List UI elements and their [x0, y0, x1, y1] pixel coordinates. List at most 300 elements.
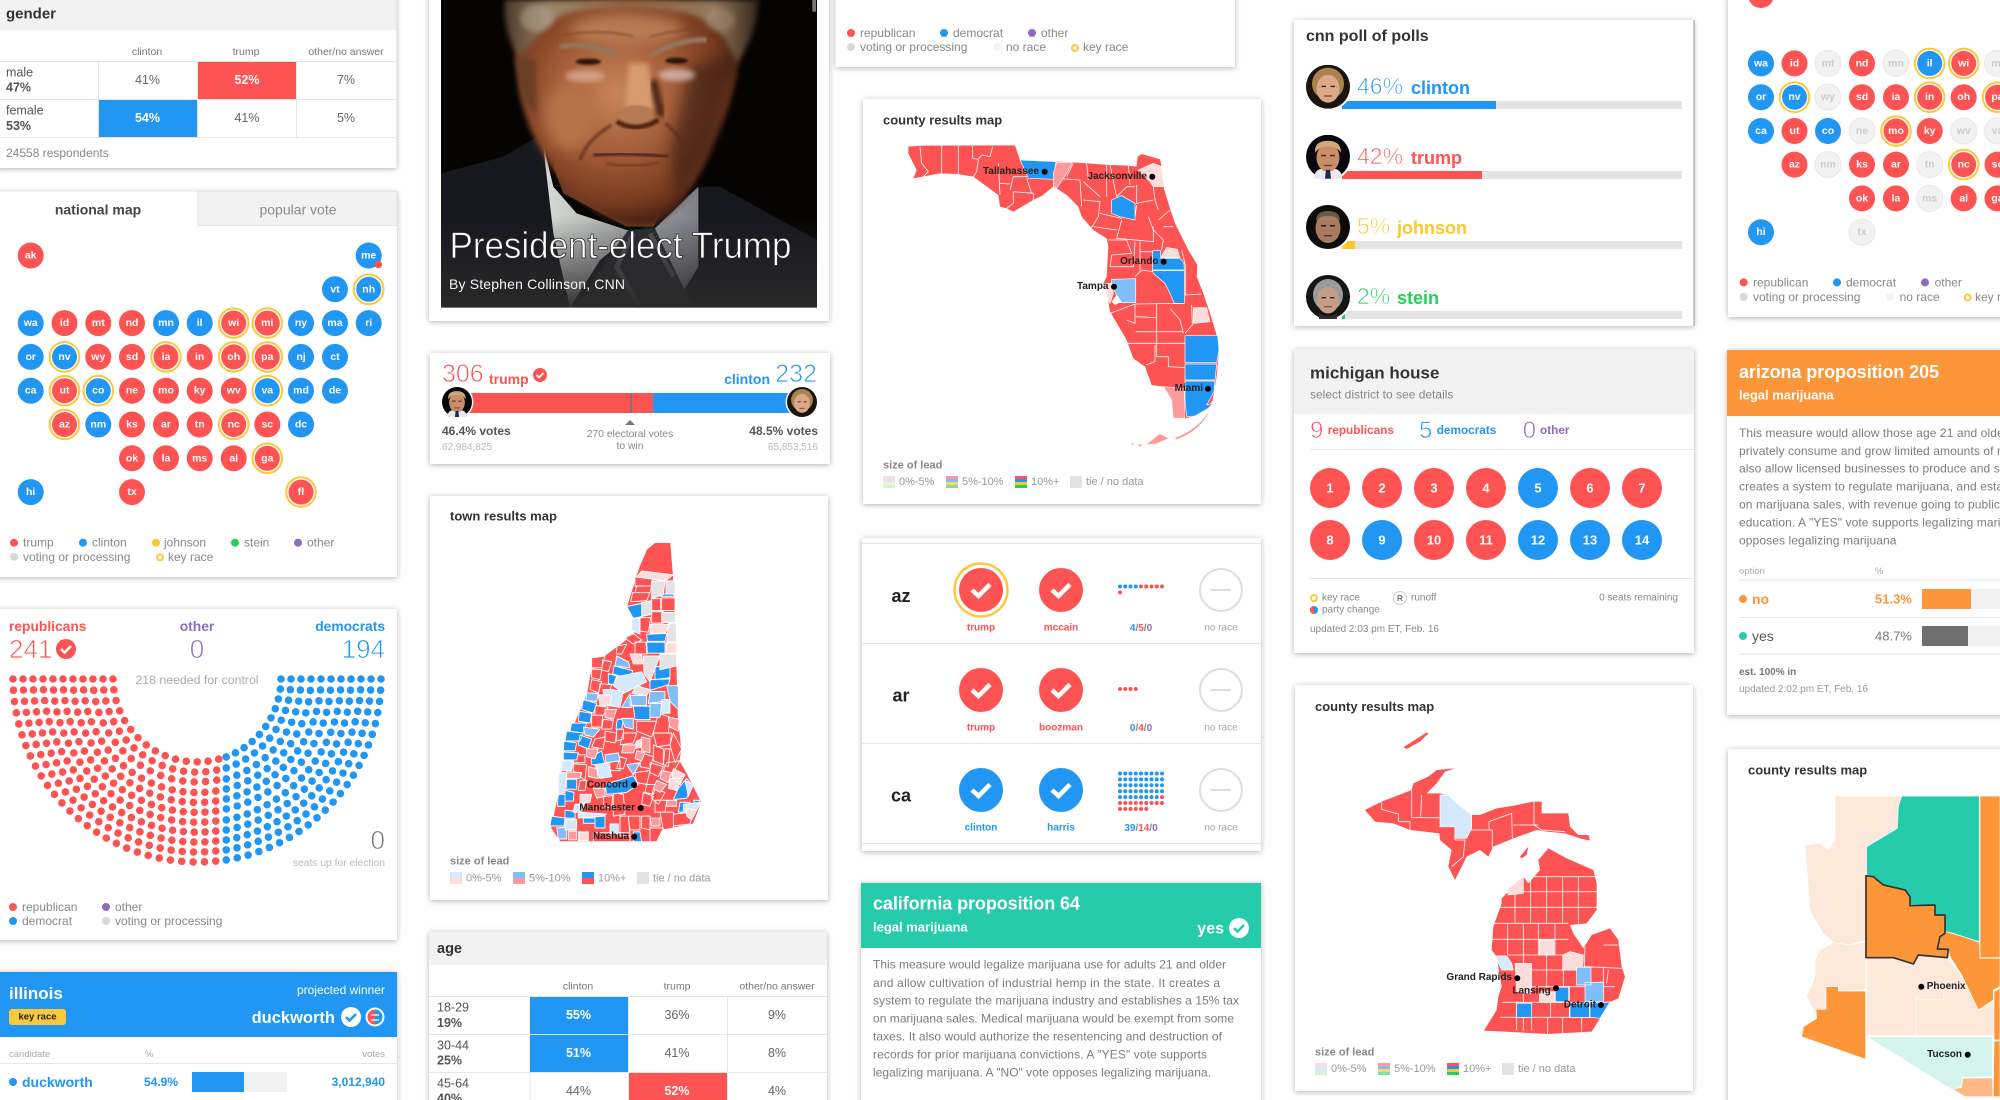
orange header: legal marijuana [1739, 388, 1834, 402]
party counts: democrats [1437, 423, 1497, 437]
party counts: 0 [1523, 417, 1536, 444]
row: ca: 39/14/0 [1124, 822, 1158, 834]
row: trump: trump [1411, 148, 1462, 168]
control threshold: 218 needed for control [135, 673, 259, 687]
map: arizona [1802, 796, 2000, 1097]
table cells: 7% [337, 73, 355, 87]
table cells: 41% [664, 1046, 690, 1060]
table cells: male [6, 66, 33, 80]
state grid: wy [1820, 91, 1835, 103]
column headers: trump [664, 980, 691, 992]
state grid map: wi [227, 317, 239, 329]
district grid: 4 [1482, 480, 1490, 496]
table heads: option [1739, 566, 1765, 577]
state grid: co [1822, 125, 1834, 137]
state grid: nd [1856, 57, 1868, 69]
district grid: 13 [1583, 532, 1597, 548]
state grid map: id [60, 317, 69, 329]
column headers: clinton [132, 46, 162, 58]
city labels: Manchester [579, 802, 635, 814]
description: on marijuana sales, with revenue going to public [1739, 498, 2000, 512]
party counts: other [1540, 423, 1570, 437]
legend: key race [168, 550, 214, 564]
row: no [1739, 589, 2000, 609]
state grid map: az [59, 418, 70, 430]
table cells: 25% [437, 1054, 462, 1068]
table cells: 8% [768, 1046, 786, 1060]
size of lead legend: size of lead [883, 460, 942, 472]
row: ca: no race [1204, 822, 1238, 834]
size of lead legend [883, 460, 1144, 488]
state grid map: mn [158, 317, 174, 329]
state grid map: wy [90, 351, 105, 363]
description: legalizing marijuana. A "NO" vote opposes legalizing marijuana. [873, 1066, 1211, 1080]
state grid map: ms [192, 452, 207, 464]
state grid map: ct [330, 351, 340, 363]
size of lead legend: 0%-5% [1331, 1063, 1367, 1075]
state grid map: sd [126, 351, 138, 363]
description: system to regulate the marijuana industry and establishes a 15% tax [873, 994, 1239, 1008]
state grid map: me [361, 250, 376, 262]
state grid: in [1925, 91, 1934, 103]
map: new hampshire [550, 542, 702, 842]
state grid: hi [1756, 226, 1766, 238]
row: duckworth: 54.9% [144, 1075, 178, 1089]
state grid: ok [1856, 192, 1868, 204]
state grid map: ri [365, 317, 372, 329]
state grid map: oh [227, 351, 240, 363]
state grid: wv [1956, 125, 1971, 137]
row: yes: 48.7% [1875, 628, 1912, 644]
table heads: votes [362, 1049, 385, 1060]
blue header: key race [18, 1012, 57, 1022]
state grid map: fl [298, 486, 304, 498]
state grid: mo [1888, 125, 1904, 137]
state grid: wa [1753, 57, 1768, 69]
state grid map: hi [26, 486, 35, 498]
table cells: 44% [566, 1084, 591, 1098]
footer legend: key race [1322, 592, 1360, 604]
footer legend: 0 seats remaining [1599, 592, 1678, 604]
state grid map: nv [58, 351, 71, 363]
city labels: Tampa [1077, 281, 1109, 292]
state grid map: nm [90, 418, 106, 430]
state grid map: il [197, 317, 203, 329]
legend: stein [244, 536, 269, 550]
panel: florida county results map [863, 99, 1261, 504]
row: duckworth: 3,012,940 [332, 1075, 385, 1089]
size of lead legend: 5%-10% [962, 476, 1004, 488]
teal header: legal marijuana [873, 920, 968, 934]
table cells: 55% [566, 1008, 591, 1022]
row: az: az [891, 586, 911, 606]
state grid: ia [1892, 91, 1901, 103]
row: ca: harris [1047, 822, 1075, 834]
footer legend: R [1397, 593, 1403, 603]
state grid: tx [1857, 226, 1867, 238]
table cells: 30-44 [437, 1038, 469, 1052]
table heads [1739, 566, 1884, 577]
legend [847, 26, 1129, 54]
state grid: ca [1755, 125, 1767, 137]
state grid: ut [1790, 125, 1800, 137]
row: az: no race [1204, 622, 1238, 634]
state grid map: co [92, 385, 104, 397]
state grid map: sc [261, 418, 273, 430]
seats up for election: 0 [371, 825, 385, 855]
city labels: Tucson [1927, 1049, 1962, 1060]
row: yes [1739, 626, 2000, 646]
hemicycle seat chart: democrats [226, 679, 381, 860]
table cells: 54% [135, 111, 160, 125]
map: florida [908, 145, 1219, 447]
table cells [0, 61, 396, 138]
row: johnson [1304, 203, 1682, 251]
state grid: id [1790, 57, 1799, 69]
party counts: republicans [1328, 423, 1394, 437]
legend [9, 900, 222, 928]
legend: voting or processing [1753, 290, 1860, 304]
description [873, 958, 1239, 1080]
table cells: 51% [566, 1046, 591, 1060]
panel: senate state grid (cropped) [1728, 0, 2000, 317]
state grid: al [1959, 192, 1968, 204]
column headers: trump [233, 46, 260, 58]
size of lead legend: 10%+ [1463, 1063, 1491, 1075]
table heads: candidate [9, 1049, 50, 1060]
column headers [563, 980, 815, 992]
row: johnson: johnson [1396, 218, 1467, 238]
byline: By Stephen Collinson, CNN [449, 276, 625, 292]
row: ar: 0/4/0 [1130, 722, 1153, 734]
state grid map: va [261, 385, 273, 397]
table cells: 18-29 [437, 1000, 469, 1014]
footer notes [1739, 667, 1868, 695]
size of lead legend: tie / no data [1518, 1063, 1576, 1075]
legend: democrat [953, 26, 1004, 40]
state grid: la [1892, 192, 1901, 204]
teal header [861, 883, 1261, 948]
party counts: 9 [1310, 417, 1323, 444]
portrait: trump [440, 386, 474, 418]
state grid: oh [1957, 91, 1970, 103]
panel: michigan county results map [1295, 685, 1693, 1091]
teal header: yes [1197, 920, 1224, 938]
party counts [1310, 417, 1570, 444]
blue header: duckworth [252, 1009, 335, 1027]
row: ar: ar [892, 686, 910, 706]
row: ar: no race [1204, 722, 1238, 734]
state grid map: ks [126, 418, 138, 430]
vote bar [460, 393, 790, 413]
tabs [55, 192, 397, 226]
panel: town results map [430, 496, 828, 900]
row: trump: 42% [1357, 143, 1403, 169]
state grid: or [1756, 91, 1766, 103]
row: az: trump [967, 622, 995, 634]
size of lead legend [450, 856, 711, 884]
table cells: 41% [234, 111, 260, 125]
district grid: 1 [1326, 480, 1334, 496]
row: clinton: 46% [1357, 73, 1403, 99]
party totals: 0 [190, 634, 204, 664]
district grid: 2 [1378, 480, 1386, 496]
row: stein: 2% [1357, 283, 1390, 309]
district grid: 7 [1638, 480, 1646, 496]
blue header [0, 972, 397, 1037]
table cells: 5% [337, 111, 355, 125]
table heads: % [145, 1049, 154, 1060]
state grid: il [1927, 57, 1933, 69]
state grid map: ar [161, 418, 171, 430]
legend: no race [1006, 40, 1046, 54]
legend: democrat [22, 914, 73, 928]
state grid map: ut [60, 385, 70, 397]
tabs: popular vote [259, 201, 337, 217]
state grid map: ma [327, 317, 343, 329]
portrait: clinton [786, 386, 818, 418]
row: clinton [1304, 63, 1682, 111]
title: county results map [1748, 762, 1867, 778]
footer legend: runoff [1411, 592, 1437, 604]
row: johnson: 5% [1357, 213, 1390, 239]
state grid map: al [229, 452, 238, 464]
state grid map: pa [261, 351, 274, 363]
panel: arizona county results map [1728, 749, 2000, 1100]
size of lead legend: 10%+ [598, 872, 626, 884]
map: michigan [1365, 732, 1625, 1034]
city labels [579, 780, 644, 842]
size of lead legend: 5%-10% [529, 872, 571, 884]
panel: cnn poll of polls [1294, 20, 1694, 326]
state grid map: tn [195, 418, 205, 430]
state grid map: mo [158, 385, 174, 397]
state grid map: or [25, 351, 36, 363]
header: gender: gender [6, 6, 56, 22]
footer legend [1310, 592, 1678, 635]
trump total: 306 [442, 360, 484, 388]
size of lead legend [1315, 1047, 1576, 1075]
row: stein [1304, 273, 1682, 321]
legend: johnson [163, 536, 206, 550]
legend: voting or processing [115, 914, 222, 928]
legend: republican [860, 26, 915, 40]
description: and allow cultivation of industrial hemp in the state. It creates a [873, 976, 1220, 990]
state grid map: wv [226, 385, 241, 397]
state grid map: ia [162, 351, 171, 363]
row: ar [892, 668, 1242, 734]
row: stein: stein [1397, 288, 1439, 308]
header: age [429, 932, 827, 965]
footer legend: updated 2:03 pm ET, Feb. 16 [1310, 624, 1439, 635]
row: ca [891, 768, 1242, 834]
state grid: tn [1925, 159, 1935, 171]
header [1294, 349, 1694, 414]
panel: national map [0, 192, 397, 577]
panel: gender exit poll table [0, 0, 396, 168]
clinton total: clinton [724, 371, 770, 387]
city labels: Concord [587, 780, 628, 790]
city labels: Orlando [1120, 256, 1158, 267]
orange header [1727, 350, 2000, 416]
270 marker [587, 420, 673, 452]
state grid map: vt [330, 283, 340, 295]
title: county results map [883, 112, 1002, 128]
trump total [442, 360, 547, 388]
city labels: Lansing [1512, 986, 1551, 996]
seats up for election: seats up for election [293, 858, 385, 869]
table cells: 36% [664, 1008, 690, 1022]
party totals: other [180, 619, 215, 634]
row: duckworth [9, 1072, 385, 1092]
panel: state race table [862, 538, 1261, 851]
legend: other [1935, 275, 1962, 289]
clinton total [724, 360, 817, 388]
state grid map: mt [92, 317, 105, 329]
popular vote: trump: 46.4% votes [442, 424, 511, 438]
state grid map: ny [295, 317, 307, 329]
state grid map: la [162, 452, 171, 464]
legend: key race [1083, 40, 1129, 54]
column headers: other/no answer [739, 980, 815, 992]
state grid: sd [1856, 91, 1868, 103]
state grid: ne [1856, 125, 1868, 137]
hemicycle seat chart: republicans [13, 679, 219, 862]
size of lead legend: tie / no data [653, 872, 711, 884]
state grid map: ak [25, 250, 37, 262]
state grid: ks [1856, 159, 1868, 171]
popular vote: clinton [749, 424, 818, 453]
size of lead legend: size of lead [1315, 1047, 1374, 1059]
state grid map [18, 242, 384, 507]
city labels: Grand Rapids [1446, 972, 1512, 983]
legend: democrat [1846, 275, 1897, 289]
state grid: nc [1958, 159, 1970, 171]
panel: electoral vote bar [430, 353, 830, 464]
description: taxes. It also would authorize the resentencing and destruction of [873, 1030, 1223, 1044]
table cells: 19% [437, 1016, 462, 1030]
column headers: other/no answer [308, 46, 384, 58]
state grid map: tx [127, 486, 137, 498]
district grid: 5 [1534, 480, 1542, 496]
row: ca: clinton [965, 822, 997, 834]
legend: republican [1753, 275, 1808, 289]
district grid: 6 [1586, 480, 1594, 496]
table heads: % [1875, 566, 1884, 577]
state grid map: nh [362, 283, 375, 295]
table cells: 53% [6, 119, 31, 133]
state grid: ms [1922, 192, 1937, 204]
size of lead legend: 0%-5% [466, 872, 502, 884]
teal header: california proposition 64 [873, 894, 1080, 914]
tabs: national map [55, 201, 141, 217]
party totals: 241 [9, 634, 52, 664]
description: on marijuana sales. Medical marijuana would be exempt from some [873, 1012, 1234, 1026]
legend: other [115, 900, 142, 914]
party counts: 5 [1419, 417, 1432, 444]
title: county results map [1315, 699, 1434, 714]
panel: president-elect article [429, 0, 829, 321]
party totals [9, 619, 385, 664]
state grid map: ga [261, 452, 274, 464]
city labels: Tallahassee [983, 166, 1039, 177]
legend: voting or processing [23, 550, 130, 564]
state grid: wi [1957, 57, 1969, 69]
table cells: 47% [6, 81, 31, 95]
panel: illinois senate race [0, 972, 397, 1100]
row: duckworth: duckworth [22, 1074, 93, 1090]
header: select district to see details [1310, 387, 1453, 401]
district grid: 12 [1531, 532, 1545, 548]
state grid map: de [329, 385, 341, 397]
size of lead legend: 0%-5% [899, 476, 935, 488]
blue header: illinois [9, 984, 63, 1003]
table cells [429, 996, 827, 1100]
footer notes: est. 100% in [1739, 667, 1796, 678]
party totals: democrats [315, 619, 385, 634]
city labels: Detroit [1564, 1000, 1597, 1010]
table cells: 4% [768, 1084, 786, 1098]
seats up for election [293, 825, 385, 869]
table cells: 52% [664, 1084, 690, 1098]
table heads [9, 1049, 385, 1060]
legend: no race [1900, 290, 1940, 304]
row: az: 4/5/0 [1130, 622, 1153, 634]
size of lead legend: 10%+ [1031, 476, 1059, 488]
panel: senate map legend [836, 0, 1235, 67]
description [1739, 426, 2000, 547]
size of lead legend: tie / no data [1086, 476, 1144, 488]
panel: arizona proposition 205 [1727, 350, 2000, 715]
header: age: age [437, 941, 462, 957]
description: This measure would legalize marijuana use for adults 21 and older [873, 958, 1226, 972]
table cells: 52% [234, 73, 260, 87]
popular vote: clinton: 48.5% votes [749, 424, 818, 438]
district grid [1310, 468, 1662, 560]
district grid: 3 [1430, 480, 1438, 496]
state grid map: ne [126, 385, 138, 397]
state grid map: nc [228, 418, 240, 430]
state grid map: dc [295, 418, 307, 430]
column headers [132, 46, 384, 58]
panel: michigan house [1294, 349, 1694, 653]
row: no: no [1752, 591, 1769, 607]
size of lead legend: 5%-10% [1394, 1063, 1436, 1075]
state grid map: nd [126, 317, 138, 329]
state grid map: in [195, 351, 204, 363]
popular vote: trump [442, 424, 511, 453]
orange header: arizona proposition 205 [1739, 362, 1939, 382]
row: no: 51.3% [1875, 592, 1912, 606]
legend [10, 536, 334, 564]
legend: republican [22, 900, 77, 914]
district grid: 14 [1635, 532, 1650, 548]
legend: voting or processing [860, 40, 967, 54]
state grid map: ca [25, 385, 37, 397]
trump total: trump [489, 371, 529, 387]
state grid: mn [1888, 57, 1904, 69]
row: trump [1304, 133, 1682, 181]
district grid: 11 [1479, 532, 1493, 548]
district grid: 8 [1326, 532, 1334, 548]
city labels [1446, 972, 1604, 1010]
state grid [1748, 0, 2000, 245]
city labels: Phoenix [1927, 981, 1966, 992]
district grid: 9 [1378, 532, 1386, 548]
description: records for prior marijuana convictions. A "YES" vote supports [873, 1048, 1207, 1062]
table cells: 45-64 [437, 1076, 469, 1090]
state grid: ky [1924, 125, 1936, 137]
